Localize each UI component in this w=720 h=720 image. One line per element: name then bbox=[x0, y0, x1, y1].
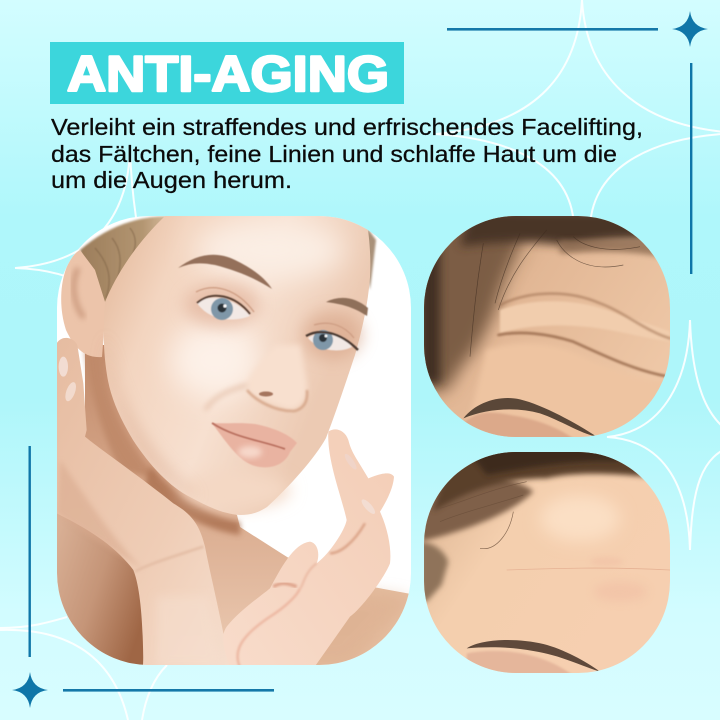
lips bbox=[212, 423, 297, 467]
eyebrows bbox=[178, 255, 272, 289]
description text: Verleiht ein straffendes und erfrischendes Facelifting, bbox=[51, 114, 643, 140]
neck bbox=[85, 345, 300, 665]
description text: das Fältchen, feine Linien und schlaffe Haut um die bbox=[51, 141, 617, 167]
ear bbox=[61, 250, 106, 357]
eyebrow bbox=[465, 412, 572, 437]
description text: um die Augen herum. bbox=[51, 167, 292, 193]
left shoulder and arm bbox=[57, 514, 144, 665]
face bbox=[104, 216, 370, 515]
eye socket shading bbox=[184, 283, 260, 327]
right shoulder bbox=[283, 554, 409, 665]
description text bbox=[51, 114, 643, 193]
title badge: ANTI-AGING bbox=[67, 46, 389, 102]
hair bbox=[420, 210, 520, 390]
photo: smooth forehead bbox=[420, 445, 670, 678]
hair bbox=[420, 473, 533, 542]
photo: wrinkled forehead bbox=[420, 210, 670, 443]
photo: woman touching her face bbox=[57, 216, 411, 673]
left hand bbox=[57, 338, 231, 673]
eyes bbox=[196, 288, 358, 350]
fine line and redness bbox=[507, 568, 670, 570]
forehead folds bbox=[500, 301, 670, 342]
hair bbox=[80, 216, 376, 305]
eyebrow bbox=[466, 650, 570, 673]
nose bbox=[264, 344, 308, 409]
right hand bbox=[223, 429, 394, 673]
